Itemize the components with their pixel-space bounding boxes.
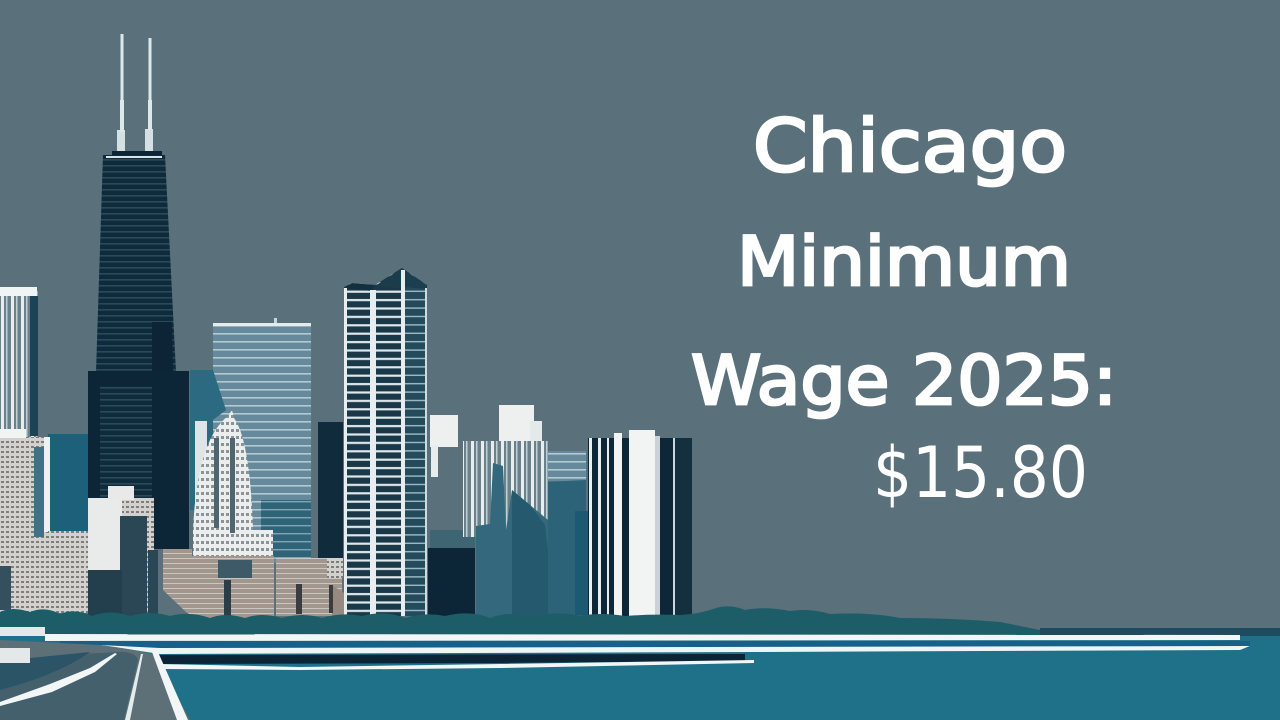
roadside blocks <box>0 627 45 636</box>
blue band <box>60 641 1250 648</box>
building: Willis-style dark tower with antennas <box>88 34 189 549</box>
dark road verge <box>0 652 90 690</box>
far blue buildings <box>48 370 475 620</box>
title line: Minimum: Minimum <box>737 223 1071 302</box>
building: white and black striped block <box>588 430 692 618</box>
title line: Chicago: Chicago <box>753 104 1067 188</box>
far horizon strip <box>1040 628 1280 636</box>
title <box>691 104 1117 514</box>
building: tall white striped tower <box>344 268 427 616</box>
building: left lower white block <box>0 429 90 613</box>
building: left striped tower <box>0 287 38 441</box>
road inner surface <box>0 652 138 720</box>
wage amount: $15.80 <box>873 432 1088 514</box>
lake <box>0 636 1280 720</box>
skyline illustration <box>0 34 692 620</box>
building: floating white blocks and center cluster <box>428 405 589 620</box>
tree line <box>0 606 1040 640</box>
building: dark slab <box>318 422 343 562</box>
building: low tan blocks <box>163 549 362 618</box>
building: ornate crown tower <box>193 410 273 620</box>
road edge white <box>152 652 188 720</box>
white line <box>160 660 754 670</box>
white band two <box>100 645 1250 654</box>
road <box>0 640 190 720</box>
dark breakwater <box>155 654 745 664</box>
building: striped glass slab <box>213 318 311 563</box>
shore white band <box>45 634 1240 641</box>
title line: Wage 2025: Wage 2025: <box>691 342 1117 421</box>
building: white and dark block <box>88 486 158 616</box>
road white dashes <box>0 653 117 706</box>
road lane line <box>125 654 143 720</box>
lake and shoreline <box>0 627 1280 720</box>
